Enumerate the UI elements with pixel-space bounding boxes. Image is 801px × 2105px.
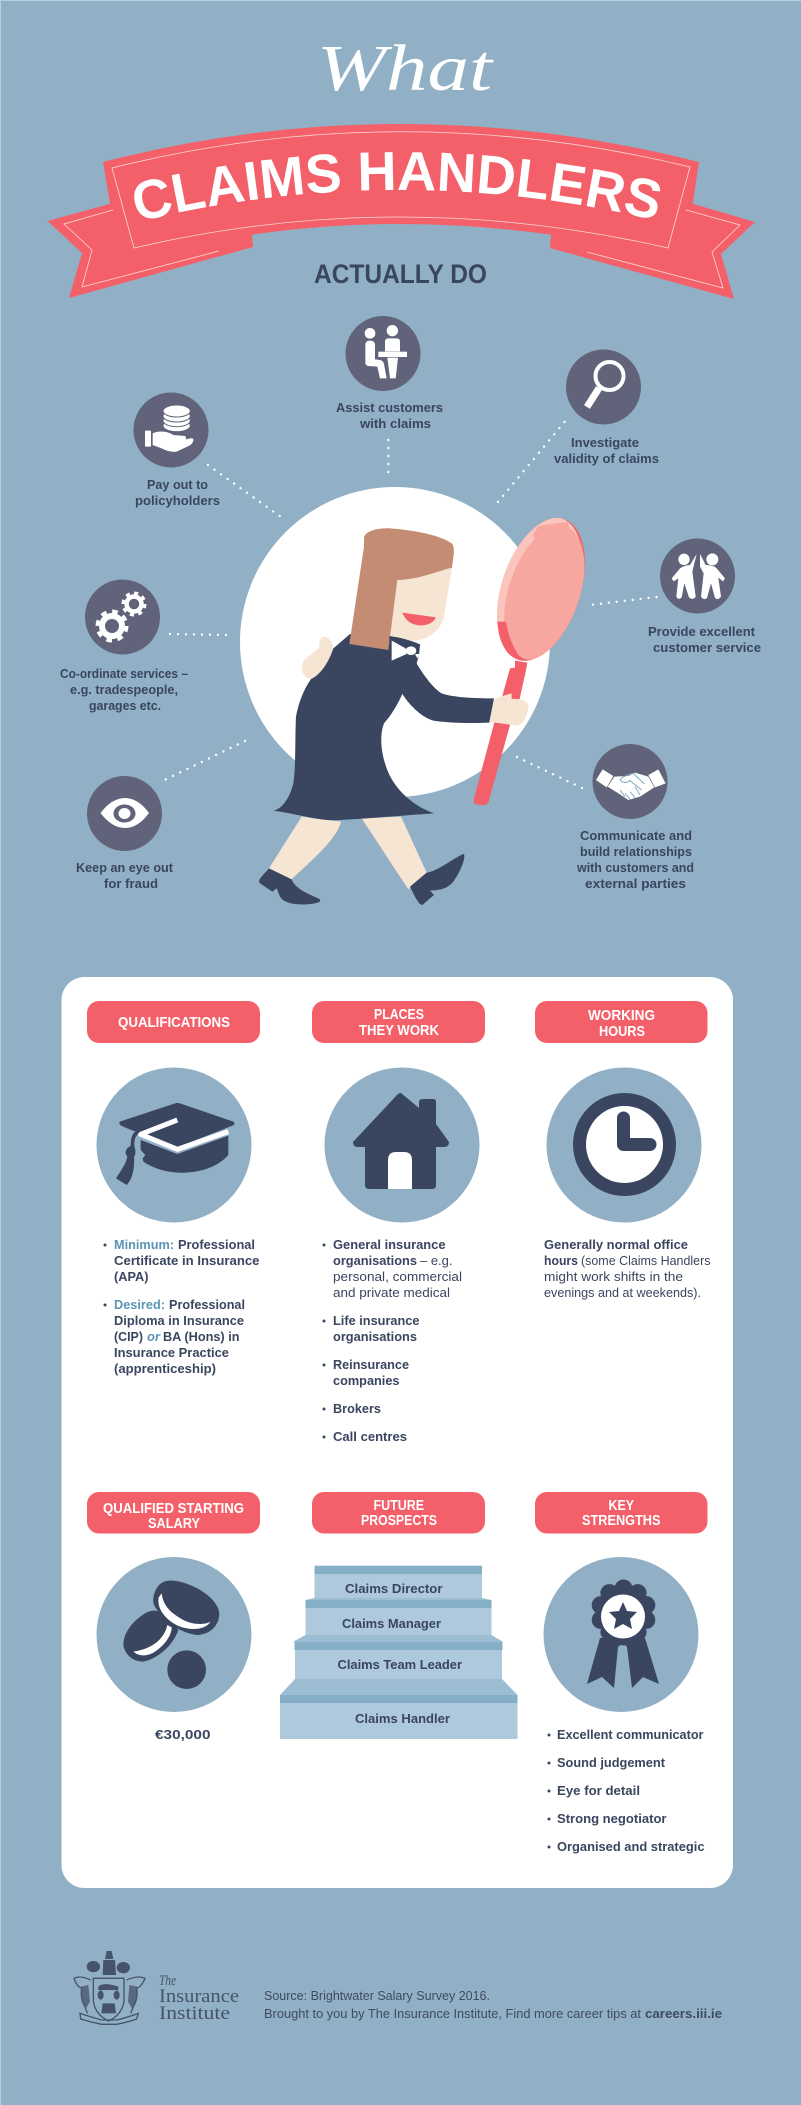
panel: central figure xyxy=(164,422,656,905)
text: qualifications: BA (Hons) in xyxy=(163,1329,240,1344)
label: communicate: with customers and xyxy=(576,860,694,875)
logo: Insurance Institute crest: The xyxy=(159,1973,176,1989)
text: qualifications: (apprenticeship) xyxy=(114,1361,216,1376)
text: places they work: Life insurance xyxy=(333,1313,420,1328)
icon: assist customers xyxy=(346,316,420,391)
icon: graduation cap xyxy=(96,1068,252,1222)
text: key strengths: Organised and strategic xyxy=(557,1839,704,1854)
footer: source and credit: careers.iii.ie xyxy=(645,2006,722,2021)
logo: Insurance Institute crest: Institute xyxy=(159,2003,230,2024)
text: working hours: (some Claims Handlers xyxy=(581,1253,711,1268)
heading: key strengths: STRENGTHS xyxy=(582,1512,660,1529)
step: claims team leader xyxy=(293,1635,503,1679)
icon: magnifying glass xyxy=(566,350,641,424)
text: key strengths: Strong negotiator xyxy=(557,1811,666,1826)
heading: key strengths: KEY xyxy=(608,1497,634,1514)
step: claims director xyxy=(314,1566,482,1598)
text: places they work: General insurance xyxy=(333,1237,446,1252)
label: communicate: external parties xyxy=(585,876,686,891)
icon: clock xyxy=(546,1068,702,1222)
label: pay out: Pay out to xyxy=(147,477,208,492)
text: working hours xyxy=(544,1237,711,1300)
heading: qualifications: QUALIFICATIONS xyxy=(118,1014,230,1031)
text: places they work: companies xyxy=(333,1373,400,1388)
label: assist customers: with claims xyxy=(359,416,431,431)
label: customer service xyxy=(648,624,761,655)
icon: rosette xyxy=(544,1557,698,1712)
icon: coins and hand xyxy=(134,392,208,468)
label: customer service: customer service xyxy=(653,640,761,655)
label: co-ordinate: garages etc. xyxy=(89,698,161,713)
text: qualifications: (APA) xyxy=(114,1269,148,1284)
text: key strengths xyxy=(548,1727,704,1854)
text: working hours: might work shifts in the xyxy=(544,1269,683,1284)
label: communicate: build relationships xyxy=(580,844,692,859)
label: assist customers xyxy=(336,400,443,431)
logo: Insurance Institute crest xyxy=(74,1951,239,2024)
text: qualifications: Professional xyxy=(178,1237,255,1252)
step: claims director: Claims Director xyxy=(345,1581,442,1596)
text: working hours: hours xyxy=(544,1253,578,1268)
text: qualifications: Diploma in Insurance xyxy=(114,1313,244,1328)
heading: qualifications xyxy=(87,1001,260,1043)
step: claims manager xyxy=(306,1598,492,1635)
footer: source and credit: Brought to you by The Insurance Institute, Find more career tips at xyxy=(264,2006,641,2021)
label: assist customers: Assist customers xyxy=(336,400,443,415)
text: places they work: Call centres xyxy=(333,1429,407,1444)
label: co-ordinate: Co-ordinate services – xyxy=(60,666,188,681)
text: places they work: personal, commercial xyxy=(333,1269,462,1284)
label: communicate xyxy=(576,828,694,891)
text: working hours: evenings and at weekends). xyxy=(544,1285,701,1300)
label: investigate: validity of claims xyxy=(554,451,659,466)
label: fraud xyxy=(76,860,174,891)
heading: future prospects xyxy=(312,1492,485,1534)
label: communicate: Communicate and xyxy=(580,828,692,843)
text: working hours: Generally normal office xyxy=(544,1237,688,1252)
text: qualifications: Insurance Practice xyxy=(114,1345,229,1360)
text: places they work: Reinsurance xyxy=(333,1357,409,1372)
text: places they work: and private medical xyxy=(333,1285,450,1300)
label: pay out xyxy=(135,477,220,508)
label: co-ordinate: e.g. tradespeople, xyxy=(70,682,178,697)
text: qualifications: or xyxy=(147,1329,161,1344)
white spotlight circle xyxy=(240,487,550,797)
label: investigate: Investigate xyxy=(571,435,639,450)
label: fraud: Keep an eye out xyxy=(76,860,174,875)
footer: source and credit xyxy=(264,1988,722,2021)
heading: working hours: WORKING xyxy=(588,1007,655,1024)
icon: house xyxy=(324,1068,480,1222)
subtitle: Actually do: ACTUALLY DO xyxy=(314,259,487,289)
heading: future prospects: FUTURE xyxy=(374,1497,424,1514)
text: key strengths: Sound judgement xyxy=(557,1755,666,1770)
step: claims team leader: Claims Team Leader xyxy=(338,1657,462,1672)
text: key strengths: Excellent communicator xyxy=(557,1727,704,1742)
step: claims handler xyxy=(280,1679,518,1739)
heading: places they work: PLACES xyxy=(374,1006,424,1023)
panel: career details card xyxy=(62,977,733,1888)
label: fraud: for fraud xyxy=(104,876,158,891)
heading: future prospects: PROSPECTS xyxy=(361,1512,437,1529)
text: qualifications: Desired: xyxy=(114,1297,165,1312)
text: qualifications: (CIP) xyxy=(114,1329,143,1344)
title: What: What xyxy=(317,32,494,105)
text: places they work: organisations xyxy=(333,1329,417,1344)
text: qualifications: Minimum: xyxy=(114,1237,174,1252)
banner: Claims Handlers xyxy=(48,124,755,299)
banner: Claims Handlers: CLAIMS HANDLERS xyxy=(134,152,660,218)
logo: Insurance Institute crest: Insurance xyxy=(159,1986,239,2007)
text: qualifications xyxy=(104,1237,260,1376)
dotted connectors xyxy=(164,422,656,789)
text: places they work: Brokers xyxy=(333,1401,381,1416)
text: places they work: organisations xyxy=(333,1253,417,1268)
text: places they work: – e.g. xyxy=(420,1253,452,1268)
step: claims handler: Claims Handler xyxy=(355,1711,450,1726)
text: key strengths: Eye for detail xyxy=(557,1783,640,1798)
heading: working hours xyxy=(535,1001,708,1043)
heading: key strengths xyxy=(535,1492,708,1534)
heading: qualified starting salary xyxy=(87,1492,260,1534)
label: investigate xyxy=(554,435,659,466)
label: customer service: Provide excellent xyxy=(648,624,756,639)
icon: coins xyxy=(96,1557,252,1712)
icon: high five xyxy=(660,538,735,614)
heading: places they work: THEY WORK xyxy=(359,1022,439,1039)
icon: gears xyxy=(85,580,160,654)
text: qualifications: Certificate in Insurance xyxy=(114,1253,260,1268)
salary value: €30,000 xyxy=(155,1727,210,1742)
icon: handshake xyxy=(592,744,668,819)
illustration: woman with magnifying glass xyxy=(259,506,601,905)
heading: qualified starting salary: SALARY xyxy=(148,1515,200,1532)
label: co-ordinate xyxy=(60,666,188,713)
chart: career ladder steps xyxy=(280,1566,518,1739)
heading: working hours: HOURS xyxy=(599,1023,645,1040)
label: pay out: policyholders xyxy=(135,493,220,508)
icon: eye xyxy=(87,776,162,851)
text: places they work xyxy=(322,1237,462,1444)
text: qualifications: Professional xyxy=(169,1297,245,1312)
heading: qualified starting salary: QUALIFIED STARTING xyxy=(103,1500,244,1517)
footer: source and credit: Source: Brightwater Salary Survey 2016. xyxy=(264,1988,490,2003)
heading: places they work xyxy=(312,1001,485,1043)
step: claims manager: Claims Manager xyxy=(342,1616,441,1631)
